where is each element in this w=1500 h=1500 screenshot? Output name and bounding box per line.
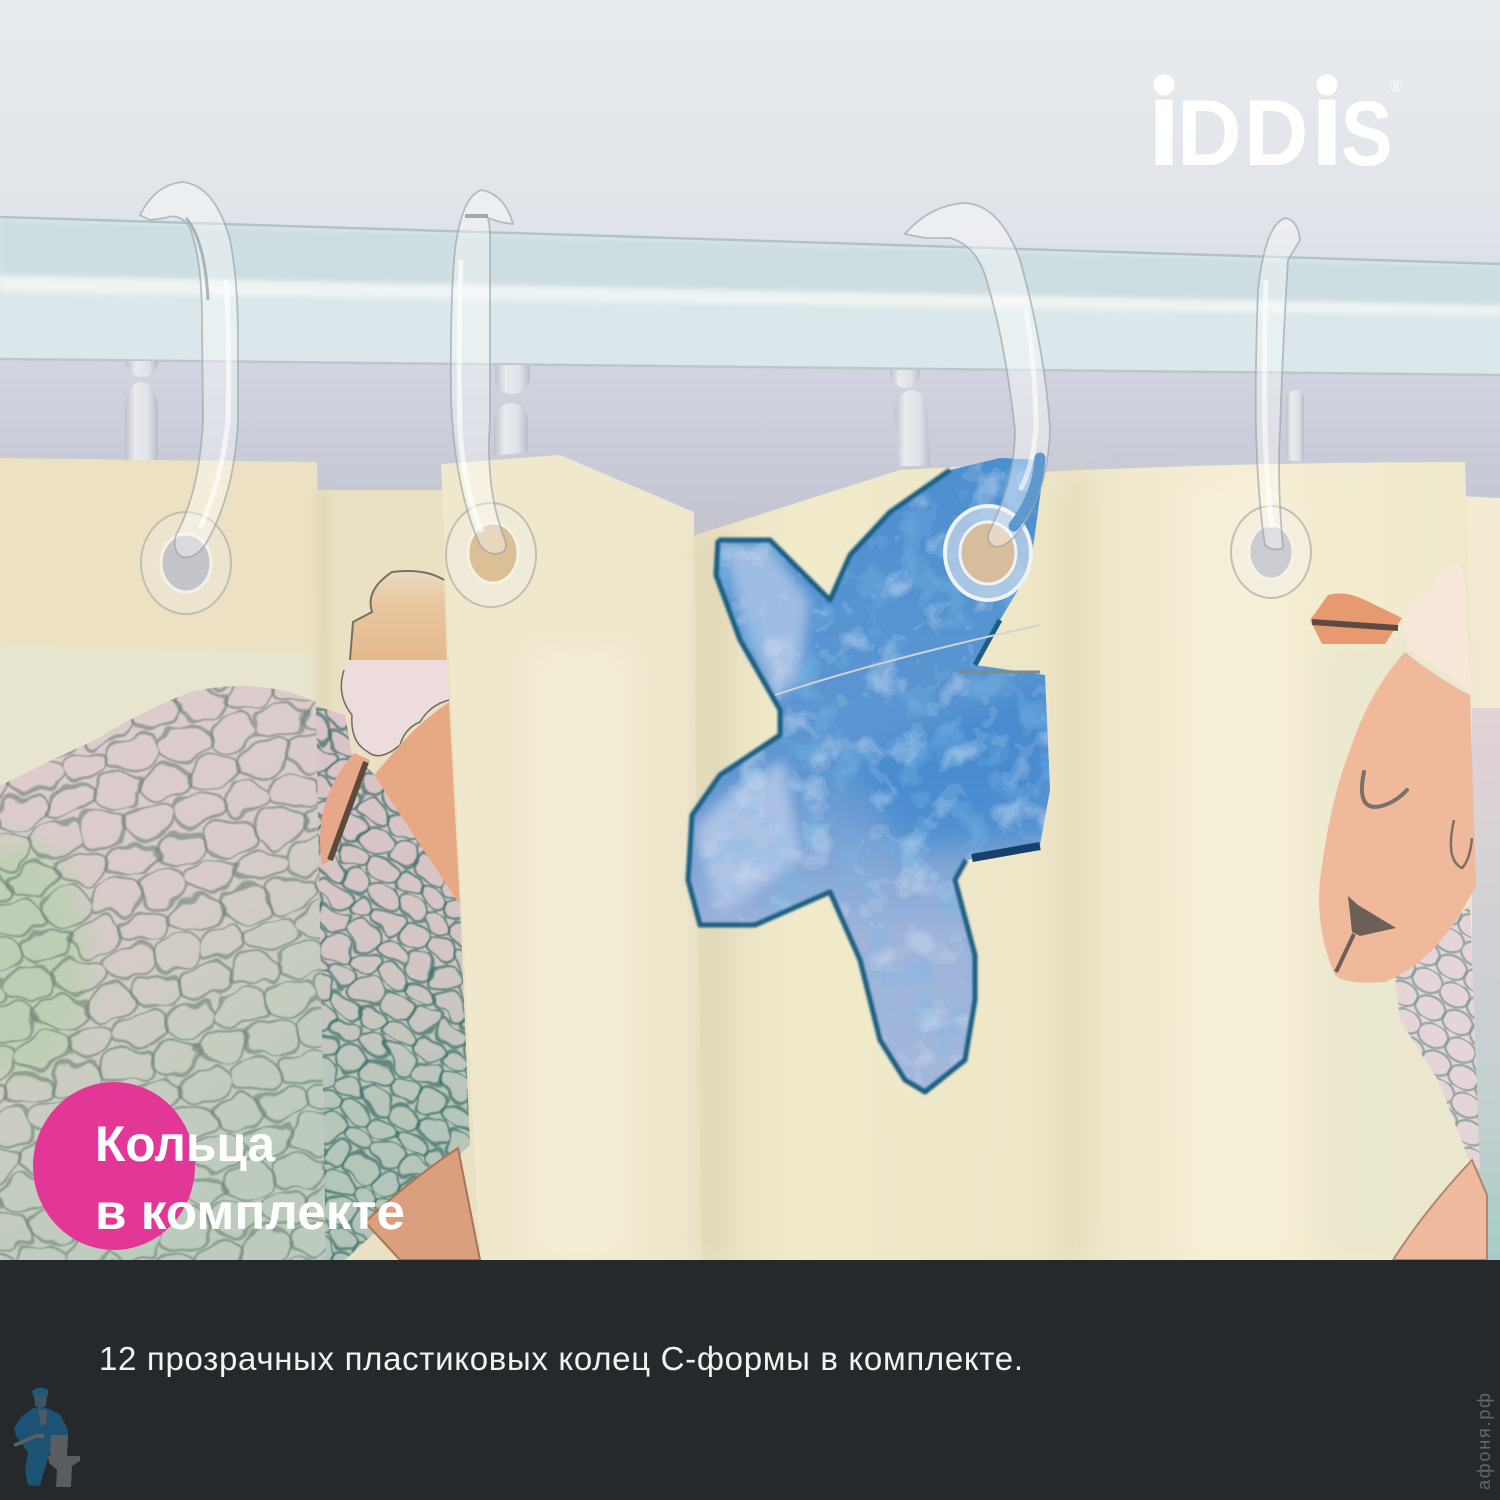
logo dot right	[1316, 74, 1338, 96]
flange	[141, 512, 231, 614]
grommet 3	[945, 506, 1031, 600]
wool cap outline	[350, 571, 444, 660]
wool fill outer	[0, 680, 330, 1270]
right sheep	[1310, 562, 1500, 1260]
flange	[1231, 506, 1311, 598]
curtain rod	[0, 217, 1500, 376]
pale left petal	[695, 760, 800, 915]
shadow: fold edge left	[318, 490, 328, 1260]
ball 2	[495, 365, 530, 394]
nose	[1348, 896, 1396, 936]
ring inner shade 2	[465, 214, 488, 218]
wool loops inner	[316, 706, 470, 1260]
nose stem	[1336, 934, 1354, 972]
flower outline lower	[688, 540, 975, 1092]
grommet 4	[1231, 506, 1311, 598]
ring body 4	[1256, 218, 1300, 549]
plumber face	[34, 1396, 47, 1409]
plumber shirt	[38, 1410, 47, 1426]
grommet 2	[446, 503, 536, 607]
heading	[95, 1116, 405, 1240]
ring inner shade 1	[186, 218, 208, 300]
capsule 3	[894, 390, 930, 466]
peg 2	[494, 365, 530, 456]
brand logo	[1154, 74, 1402, 166]
blue flower	[680, 450, 1060, 1100]
flower dark fold line	[972, 846, 1040, 858]
ring highlight 1	[200, 280, 229, 528]
left sheep wool inner	[316, 706, 470, 1260]
shading on folds	[318, 470, 1470, 1260]
toilet tank	[50, 1435, 68, 1456]
pink badge circle	[33, 1082, 195, 1250]
wool cap	[1404, 562, 1472, 695]
plumber body	[14, 1408, 68, 1486]
hole	[960, 522, 1016, 584]
curtain fold: centre right panel	[1040, 462, 1490, 1260]
right sheep wool loops	[1395, 905, 1480, 1170]
face	[1319, 652, 1476, 983]
letter D second: D	[1244, 81, 1308, 186]
ring body 2	[451, 190, 513, 554]
rod highlight	[0, 276, 1500, 316]
letter i: i	[1147, 55, 1181, 192]
icon: plumber with toilet	[13, 1388, 80, 1487]
ring 2	[446, 190, 536, 607]
ring 3	[905, 203, 1050, 600]
grey mark	[958, 670, 1040, 674]
letter i second: i	[1310, 55, 1344, 192]
flower outline upper	[718, 470, 950, 600]
wool cap	[350, 571, 447, 662]
ear	[320, 753, 370, 865]
left panel below seam	[0, 646, 335, 1260]
rod top edge	[0, 217, 1500, 264]
capsule 1	[125, 382, 158, 460]
bottom dark band	[0, 1260, 1500, 1500]
pale upper-left petal	[722, 545, 810, 700]
plumber cap	[32, 1388, 48, 1396]
description text: 12 прозрачных пластиковых колец С-формы в комплекте.	[99, 1340, 1023, 1377]
logo wordmark	[1156, 100, 1390, 166]
registered mark: ®	[1390, 77, 1403, 96]
curtain fold: back panel	[315, 490, 480, 1260]
ring highlight 2	[459, 260, 482, 532]
shadow: front pleat right	[695, 530, 731, 1260]
peg 4	[1286, 390, 1304, 462]
curtain fold: far right	[1440, 495, 1500, 1260]
rod base	[0, 218, 1500, 376]
toilet bowl	[48, 1456, 80, 1487]
shadow: right pleat	[1058, 470, 1094, 1260]
curtain fold: left panel	[0, 458, 335, 1260]
grommet 1	[141, 512, 231, 614]
highlight: right panel	[1180, 480, 1290, 1260]
ring 1	[140, 182, 238, 614]
ball 1	[126, 361, 158, 377]
letter S: S	[1341, 83, 1393, 186]
wool green tint	[0, 840, 90, 1080]
watermark: афоня.рф	[1474, 1393, 1494, 1490]
hole	[468, 523, 518, 583]
curtain fold: centre panel	[680, 462, 1075, 1260]
head top scallops	[341, 660, 449, 756]
logo dot left	[1154, 74, 1174, 96]
ear	[1310, 593, 1402, 644]
saturated right band	[850, 680, 1050, 850]
flange	[945, 506, 1031, 600]
background wall	[0, 0, 1500, 560]
pegs behind rings	[125, 361, 1304, 466]
left sheep wool outer	[0, 686, 326, 1260]
ring body 3	[905, 203, 1050, 547]
heading line 2: в комплекте	[95, 1184, 405, 1240]
letter D first: D	[1177, 81, 1241, 186]
eye right	[1451, 820, 1472, 868]
stitched hem line	[775, 625, 1040, 695]
flower body	[688, 458, 1050, 1092]
wool loops outer	[0, 686, 326, 1260]
peg 1	[125, 361, 158, 460]
ring body 1	[140, 182, 238, 557]
head face	[374, 702, 460, 905]
head top outline	[341, 670, 449, 756]
rod upper shade	[0, 220, 1500, 306]
ring highlight 3	[1020, 310, 1036, 490]
mottled pale	[692, 462, 1048, 1066]
peg 3	[890, 370, 930, 466]
hole	[161, 534, 211, 592]
right sheep wool body	[1395, 905, 1480, 1170]
ring blue lower	[1014, 458, 1040, 526]
ball 3	[890, 370, 920, 388]
ring highlight 4	[1265, 280, 1272, 528]
right panel lower tint	[1320, 640, 1470, 1260]
highlight: front pleat	[530, 650, 630, 1260]
mottled dark	[713, 468, 1050, 1054]
ear stripe	[330, 762, 366, 860]
flower pale and dark blotches	[692, 462, 1050, 1066]
hole	[1249, 525, 1293, 579]
ear dark stripe	[1312, 622, 1398, 628]
left sheep head	[320, 571, 480, 1260]
leg	[1393, 1160, 1487, 1260]
far right blurred wool	[1472, 708, 1500, 1260]
rod bottom edge	[0, 359, 1500, 375]
heading line 1: Кольца	[95, 1116, 276, 1172]
ring 4	[1231, 218, 1311, 598]
eye	[1362, 772, 1407, 807]
capsule 2	[494, 403, 528, 456]
curtain fold: front pleat	[441, 455, 702, 1260]
flower outline right	[975, 620, 1000, 665]
wool fill inner	[316, 700, 476, 1270]
flange	[446, 503, 536, 607]
wrench	[13, 1434, 44, 1447]
leg	[365, 1148, 480, 1260]
